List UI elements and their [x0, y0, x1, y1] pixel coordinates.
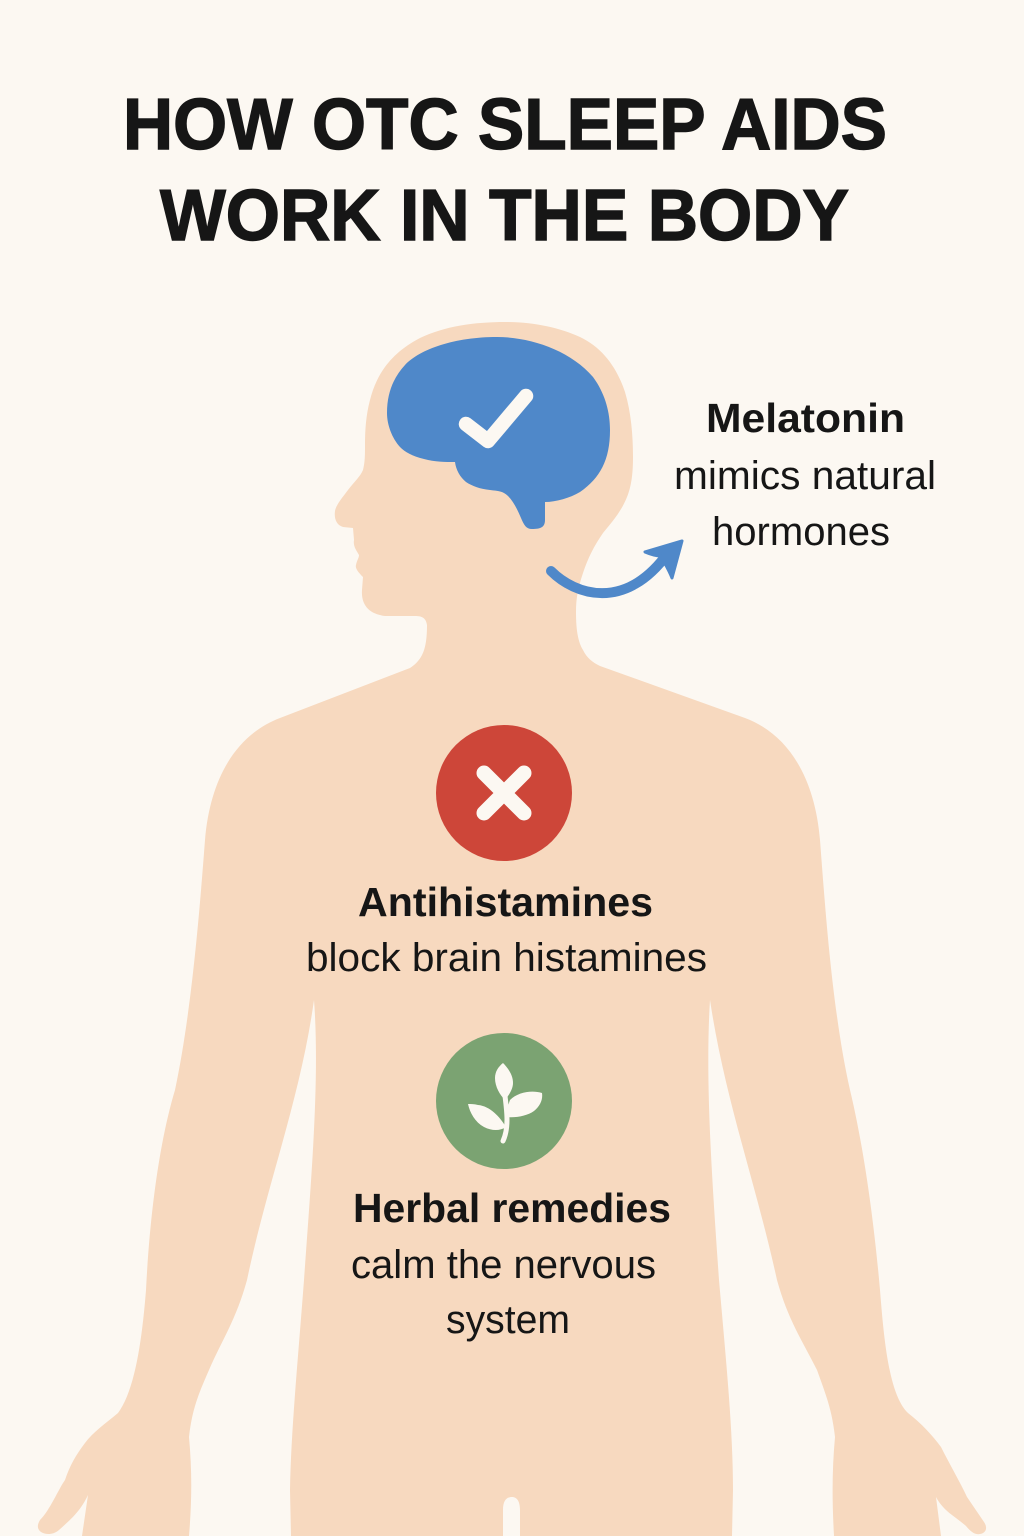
text block: herbal remedies: Herbal remedies — [353, 1185, 671, 1231]
text block: antihistamines: Antihistamines — [358, 879, 653, 925]
icon: white check mark — [466, 396, 526, 441]
human body silhouette — [38, 322, 986, 1536]
text block: melatonin — [674, 395, 936, 554]
text block: herbal remedies: calm the nervous — [351, 1243, 656, 1287]
text block: antihistamines — [306, 879, 707, 980]
text block: herbal remedies: system — [446, 1298, 570, 1342]
title: HOW OTC SLEEP AIDS — [123, 85, 887, 165]
title: WORK IN THE BODY — [160, 176, 849, 256]
title — [123, 85, 887, 256]
text block: melatonin: Melatonin — [706, 395, 905, 441]
text block: herbal remedies — [351, 1185, 671, 1342]
icon: green leaf circle — [436, 1033, 572, 1169]
icon: red cross circle — [436, 725, 572, 861]
text block: melatonin: mimics natural — [674, 454, 936, 498]
text block: antihistamines: block brain histamines — [306, 936, 707, 980]
text block: melatonin: hormones — [712, 510, 890, 554]
arrow: brain to melatonin label — [551, 541, 682, 593]
icon: blue brain — [387, 337, 610, 529]
